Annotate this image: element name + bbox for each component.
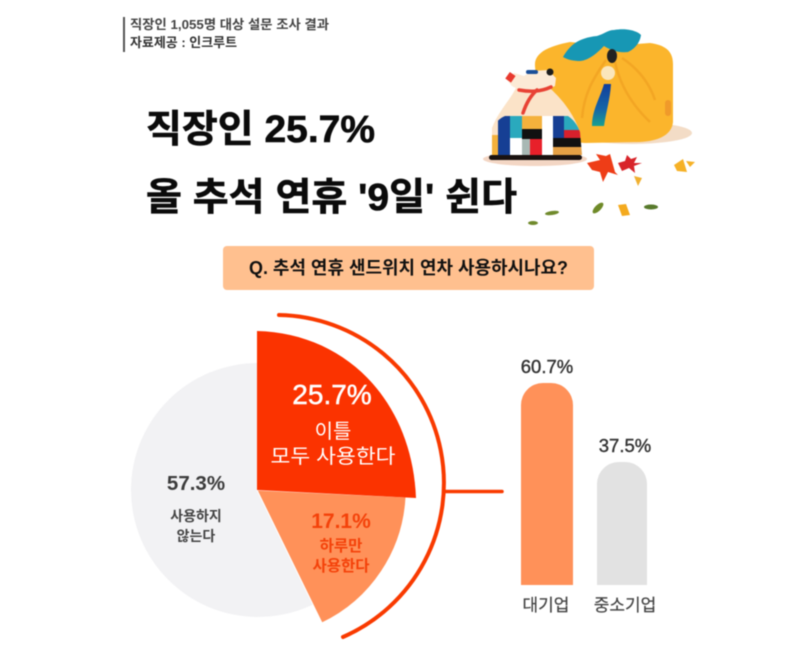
slice: one day 17.1%	[257, 490, 406, 623]
bar: small and medium companies: 중소기업	[594, 596, 656, 615]
icon: yellow wrapped gift	[535, 29, 692, 144]
bar: large companies	[521, 356, 573, 615]
source note	[123, 17, 329, 52]
bar: small and medium companies: 37.5%	[599, 435, 651, 456]
bar: large companies: 60.7%	[521, 356, 573, 377]
slice: one day 17.1%: 사용한다	[312, 557, 370, 575]
icon: tassel	[592, 84, 611, 126]
icon: patchwork pouch	[483, 68, 587, 166]
slice: both days 25.7%: 이틀	[315, 420, 351, 443]
source note: 자료제공 : 인크루트	[130, 35, 237, 50]
bar: large companies: 대기업	[523, 596, 569, 615]
icon: red string	[519, 87, 551, 113]
icon: blue knot	[563, 29, 641, 61]
arc connector to bars	[279, 315, 502, 637]
slice: not using 57.3%: 사용하지	[170, 508, 222, 524]
slice: not using 57.3%: 57.3%	[167, 472, 225, 495]
slice: not using 57.3%: 않는다	[177, 528, 215, 544]
icon: autumn leaves	[528, 154, 695, 225]
slice: not using 57.3%	[131, 363, 385, 617]
title: 직장인 25.7%	[146, 109, 375, 151]
slice: both days 25.7%: 25.7%	[292, 379, 372, 410]
bar chart: company size	[521, 356, 656, 615]
source note: 직장인 1,055명 대상 설문 조사 결과	[130, 17, 329, 32]
slice: both days 25.7%	[257, 331, 416, 498]
illustration: Chuseok gift bundles and autumn leaves	[483, 29, 695, 225]
slice: one day 17.1%: 하루만	[320, 537, 362, 555]
bar: small and medium companies	[594, 435, 656, 615]
slice: one day 17.1%: 17.1%	[311, 510, 371, 533]
question banner: Q. 추석 연휴 샌드위치 연차 사용하시나요?	[249, 258, 568, 278]
slice: both days 25.7%: 모두 사용한다	[270, 445, 396, 468]
patchwork cells	[490, 116, 583, 155]
pie chart	[131, 331, 416, 623]
title	[146, 109, 517, 219]
title: 올 추석 연휴 '9일' 쉰다	[146, 177, 517, 219]
question banner	[223, 246, 594, 290]
